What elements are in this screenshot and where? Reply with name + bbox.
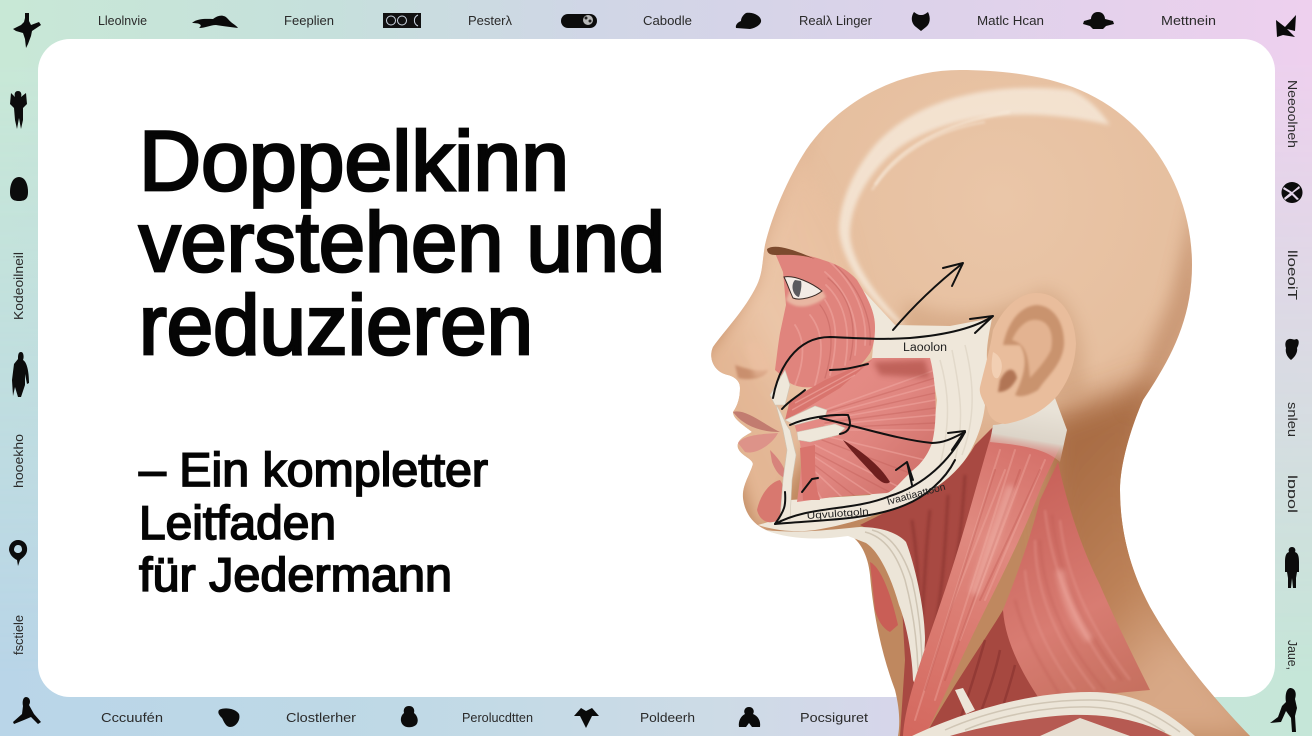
left icon and label strip bbox=[9, 91, 29, 655]
icon: running figure bbox=[13, 13, 41, 48]
mastoid tendon bbox=[990, 398, 1067, 462]
icon: oval figure bbox=[401, 706, 418, 727]
subtitle: – Ein kompletter bbox=[139, 443, 488, 496]
label: Kodeoilneil: Kodeoilneil bbox=[12, 252, 26, 320]
title: verstehen und bbox=[139, 195, 665, 289]
lower band of muscle bbox=[785, 360, 872, 420]
label: Matlc Hcan: Matlc Hcan bbox=[977, 14, 1044, 28]
arrow: chin to jaw bbox=[775, 432, 965, 524]
label: Poldeerh: Poldeerh bbox=[640, 711, 695, 725]
label: Pesterλ: Pesterλ bbox=[468, 14, 513, 28]
subtitle bbox=[139, 443, 488, 601]
icon: folded blob bbox=[736, 13, 761, 29]
icon: standing person bbox=[1285, 547, 1299, 588]
icon: faces box bbox=[383, 13, 421, 28]
arrow: mouth to jaw bbox=[790, 415, 965, 450]
facial tendon sheet bbox=[758, 285, 992, 531]
sternocleidomastoid muscle bbox=[903, 398, 1067, 736]
dark slit bbox=[843, 440, 890, 483]
icon: heart curl bbox=[1285, 339, 1299, 360]
arrow: small up bbox=[896, 462, 913, 485]
icon: backpack bbox=[10, 177, 28, 201]
clavicle band bbox=[912, 692, 1195, 736]
ear bbox=[980, 293, 1076, 424]
label: Lleolnvie: Lleolnvie bbox=[98, 14, 147, 28]
arrow: up to temple bbox=[893, 263, 963, 330]
chin muscle bbox=[757, 445, 820, 522]
cheek fan muscle bbox=[790, 358, 936, 505]
mouth tendons bbox=[770, 370, 845, 520]
icon: bust bbox=[739, 707, 760, 727]
icon: ring bbox=[9, 540, 27, 566]
icon: body figure bbox=[12, 352, 29, 397]
title bbox=[139, 114, 665, 372]
eye and brow bbox=[767, 247, 826, 306]
label: Mettnein: Mettnein bbox=[1161, 14, 1216, 28]
arrow: small tick bbox=[802, 478, 818, 492]
arrow: lower cheek line bbox=[782, 390, 805, 409]
label: Uqvulotgoln: Uqvulotgoln bbox=[806, 507, 869, 522]
label: Laoolon: Laoolon bbox=[903, 342, 947, 354]
arrows bbox=[773, 263, 993, 524]
label: hooekho: hooekho bbox=[12, 434, 26, 488]
top icon and label strip bbox=[13, 12, 1296, 48]
label: Jaue: Jaue, bbox=[1285, 640, 1299, 670]
icon: capsule bbox=[561, 14, 597, 28]
label: Peroluсdtten: Peroluсdtten bbox=[462, 711, 533, 725]
arrow: cheek to ear bbox=[773, 316, 993, 398]
title: reduzieren bbox=[139, 278, 533, 372]
label: fsctiele: fsctiele bbox=[12, 615, 26, 655]
subtitle: für Jedermann bbox=[139, 548, 452, 601]
icon: leaf shape bbox=[192, 16, 238, 28]
trapezius muscle bbox=[1003, 462, 1150, 700]
label: Realλ Linger: Realλ Linger bbox=[799, 14, 872, 28]
title: Doppelkinn bbox=[139, 114, 569, 208]
anatomical head illustration bbox=[700, 70, 1270, 736]
icon: shield head bbox=[912, 12, 930, 31]
icon: plant blob bbox=[1083, 12, 1114, 29]
white neck cord bbox=[765, 527, 975, 714]
subtitle: Leitfaden bbox=[139, 496, 336, 549]
anatomy labels bbox=[806, 342, 947, 522]
label: Pocsiguret: Pocsiguret bbox=[800, 711, 869, 725]
icon: round split bbox=[1282, 182, 1303, 203]
label: Ivaatiaattoon: Ivaatiaattoon bbox=[886, 482, 947, 508]
arrow: chin tick bbox=[775, 492, 785, 524]
icon: standing figure bbox=[10, 91, 27, 129]
label: Clostlerher: Clostlerher bbox=[286, 711, 356, 725]
right icon and label strip bbox=[1270, 80, 1303, 732]
skin silhouette bbox=[700, 70, 1270, 736]
icon: spade bbox=[574, 708, 599, 728]
label: lloeoiT: lloeoiT bbox=[1285, 250, 1299, 300]
label: Neeoolneh: Neeoolneh bbox=[1285, 80, 1299, 148]
label: snleu: snleu bbox=[1285, 402, 1299, 437]
forehead tendon highlight bbox=[839, 88, 1110, 327]
icon: heart blob bbox=[218, 708, 239, 727]
left neck muscle bbox=[870, 562, 898, 632]
orbital cheek muscle bbox=[775, 253, 875, 420]
label: Cccuufén: Cccuufén bbox=[101, 711, 163, 725]
nose and lips bbox=[733, 342, 780, 453]
icon: sitting figure bbox=[13, 697, 41, 724]
deep neck muscle bbox=[860, 425, 1040, 736]
arrow: short line bbox=[830, 364, 868, 370]
label: Feeplien: Feeplien bbox=[284, 14, 334, 28]
icon: crouching figure bbox=[1270, 688, 1297, 732]
icon: corner star bbox=[1276, 15, 1296, 37]
label: lɒɒol: lɒɒol bbox=[1285, 475, 1299, 513]
lower cord piece bbox=[955, 688, 975, 714]
label: Cabodle: Cabodle bbox=[643, 14, 692, 28]
bottom icon and label strip bbox=[13, 697, 869, 728]
